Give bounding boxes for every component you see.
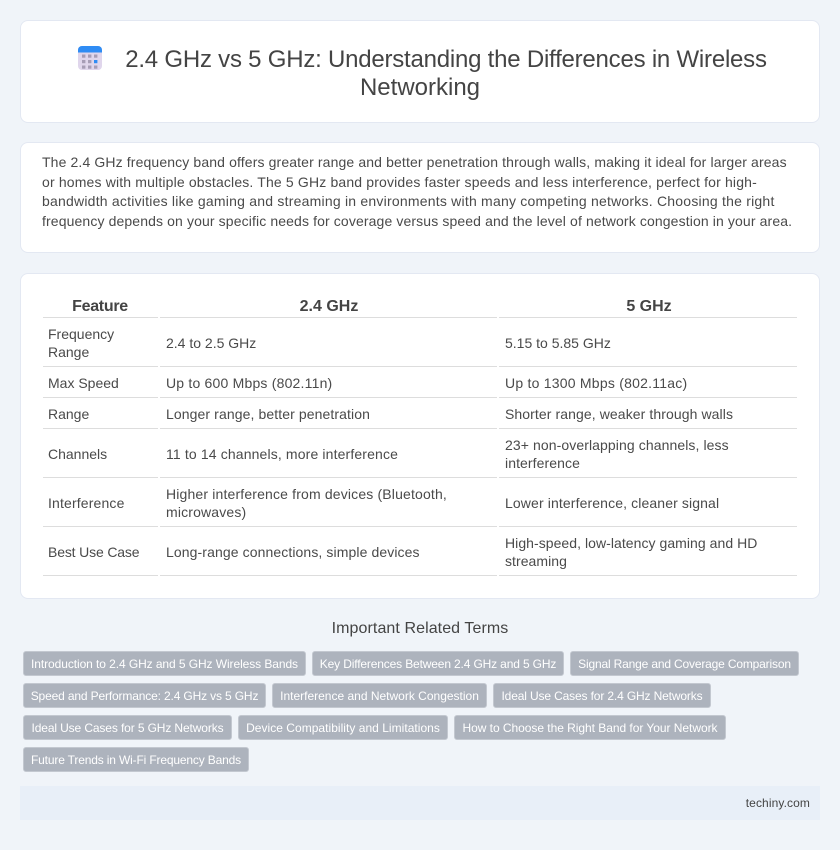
related term tags: Signal Range and Coverage Comparison: [578, 657, 791, 671]
text block: introduction: or homes with multiple obstacles. The 5 GHz band provides faster speeds and less interference, perfect for high-: [42, 174, 757, 190]
table row: max speed: Up to 600 Mbps (802.11n): [166, 375, 332, 391]
table row: best use case: High-speed, low-latency gaming and HD: [505, 535, 757, 551]
table row: frequency range: 2.4 to 2.5 GHz: [166, 335, 256, 351]
panel: header: [20, 20, 820, 123]
footer source: techiny.com: [746, 796, 810, 810]
table row: channels: Channels: [48, 446, 107, 462]
table row: range: Longer range, better penetration: [166, 406, 370, 422]
table row: best use case: Long-range connections, simple devices: [166, 544, 420, 560]
table row: range: Range: [48, 406, 89, 422]
table row: channels: [48, 437, 729, 471]
table row: frequency range: Frequency: [48, 326, 114, 342]
related term tags: Key Differences Between 2.4 GHz and 5 GHz: [320, 657, 556, 671]
title: [125, 46, 767, 101]
related term tags: Ideal Use Cases for 5 GHz Networks: [32, 721, 224, 735]
table header: [72, 298, 672, 315]
text block: introduction: The 2.4 GHz frequency band offers greater range and better penetration through walls, making it ideal for larger areas: [42, 154, 787, 170]
panel: introduction: [20, 142, 820, 253]
related term tags: Ideal Use Cases for 2.4 GHz Networks: [501, 689, 703, 703]
table row: channels: 11 to 14 channels, more interference: [166, 446, 398, 462]
table row: range: [48, 406, 733, 422]
related term tags: [23, 651, 799, 772]
table header: Feature: [72, 298, 128, 315]
table header: 5 GHz: [626, 298, 672, 315]
table row: interference: microwaves): [166, 504, 246, 520]
table row: max speed: Max Speed: [48, 375, 119, 391]
table row: max speed: Up to 1300 Mbps (802.11ac): [505, 375, 687, 391]
title: Networking: [360, 74, 480, 101]
related term tags: Speed and Performance: 2.4 GHz vs 5 GHz: [31, 689, 258, 703]
table row: interference: Lower interference, cleaner signal: [505, 495, 719, 511]
text block: introduction: [42, 154, 792, 229]
table row: frequency range: [48, 326, 611, 360]
icon: calendar: [78, 46, 102, 70]
related term tags: How to Choose the Right Band for Your Network: [462, 721, 718, 735]
footer: [20, 786, 820, 820]
related term tags: Device Compatibility and Limitations: [246, 721, 440, 735]
table row: interference: [48, 486, 719, 520]
table header: 2.4 GHz: [300, 298, 358, 315]
table row: channels: 23+ non-overlapping channels, less: [505, 437, 729, 453]
heading: important related terms: Important Related Terms: [332, 620, 508, 637]
title: 2.4 GHz vs 5 GHz: Understanding the Differences in Wireless: [125, 46, 767, 73]
related term tags: Introduction to 2.4 GHz and 5 GHz Wireless Bands: [31, 657, 298, 671]
table row: best use case: [48, 535, 757, 569]
table row: best use case: streaming: [505, 553, 567, 569]
related term tags: Interference and Network Congestion: [280, 689, 479, 703]
table row: interference: Higher interference from devices (Bluetooth,: [166, 486, 447, 502]
table row: interference: Interference: [48, 495, 125, 511]
table row: frequency range: 5.15 to 5.85 GHz: [505, 335, 611, 351]
text block: introduction: frequency depends on your specific needs for coverage versus speed and the level of network congestion in your area.: [42, 213, 792, 229]
table row: best use case: Best Use Case: [48, 544, 139, 560]
panel: comparison table: [20, 273, 820, 599]
table row: range: Shorter range, weaker through walls: [505, 406, 733, 422]
table row: frequency range: Range: [48, 344, 89, 360]
table row: max speed: [48, 375, 687, 391]
related term tags: Future Trends in Wi-Fi Frequency Bands: [31, 753, 241, 767]
text block: introduction: bandwidth activities like gaming and streaming in environments with many competing networks. Choosing the right: [42, 193, 775, 209]
table row: channels: interference: [505, 455, 580, 471]
